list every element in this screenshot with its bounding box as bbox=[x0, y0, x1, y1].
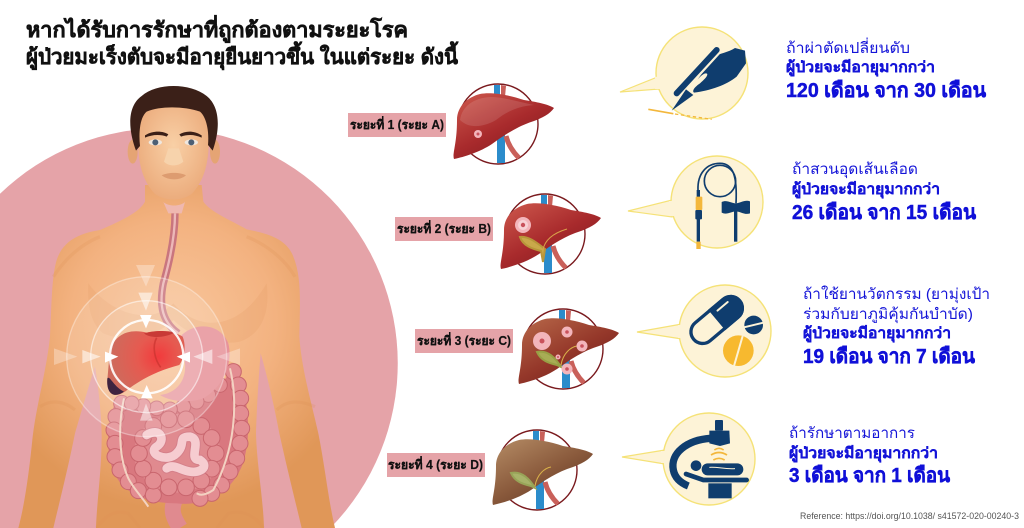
text block: liver transplant bbox=[786, 37, 986, 102]
text block: symptomatic care bbox=[789, 425, 950, 487]
text block: liver transplant: ถ้าผ่าตัดเปลี่ยนตับ bbox=[786, 37, 910, 57]
intestine backing bbox=[108, 365, 248, 504]
text block: innovative drugs: ผู้ป่วยจะมีอายุมากกว่า bbox=[803, 325, 951, 343]
speech bubble: medication bbox=[637, 285, 771, 377]
liver bbox=[107, 331, 185, 395]
icon: hand with scalpel bbox=[648, 48, 746, 119]
focus arrows bbox=[54, 265, 240, 421]
rectum bbox=[173, 497, 180, 528]
icon: pills bbox=[685, 289, 763, 366]
stage 2 label bbox=[395, 217, 493, 241]
text block: innovative drugs: ถ้าใช้ยานวัตกรรม (ยามุ่งเป้า bbox=[803, 285, 990, 304]
stage 4 label: ระยะที่ 4 (ระยะ D) bbox=[388, 456, 483, 472]
text block: embolization bbox=[792, 161, 976, 224]
pink background circle bbox=[0, 128, 398, 528]
stage 2 liver bbox=[501, 194, 601, 274]
text block: innovative drugs bbox=[803, 285, 990, 368]
text block: liver transplant: 120 เดือน จาก 30 เดือน bbox=[786, 79, 986, 102]
stage 4 liver bbox=[493, 430, 593, 510]
title: หากได้รับการรักษาที่ถูกต้องตามระยะโรค bbox=[26, 14, 408, 44]
stomach bbox=[160, 326, 230, 401]
colon bbox=[106, 364, 250, 506]
speech bubble: surgery bbox=[620, 27, 748, 119]
stage 1 label bbox=[348, 113, 446, 137]
colon streaks bbox=[120, 368, 234, 507]
text block: symptomatic care: ผู้ป่วยจะมีอายุมากกว่า bbox=[789, 445, 938, 463]
hair bbox=[130, 86, 218, 151]
icon: catheter bbox=[695, 163, 750, 249]
speech bubble: embolization bbox=[628, 156, 763, 249]
esophagus bbox=[162, 213, 178, 333]
throat bbox=[163, 202, 185, 213]
title bbox=[26, 14, 459, 71]
stage 2 label: ระยะที่ 2 (ระยะ B) bbox=[397, 220, 491, 236]
text block: symptomatic care: ถ้ารักษาตามอาการ bbox=[789, 425, 915, 442]
text block: embolization: ถ้าสวนอุดเส้นเลือด bbox=[792, 161, 918, 179]
text block: innovative drugs: ร่วมกับยาภูมิคุ้มกันบำบัด) bbox=[803, 306, 973, 324]
face bbox=[138, 101, 209, 199]
small intestine bbox=[131, 411, 224, 496]
inner focus ring bbox=[110, 320, 183, 393]
stage 3 liver bbox=[519, 309, 619, 389]
icon: scanner bbox=[673, 420, 747, 498]
text block: embolization: 26 เดือน จาก 15 เดือน bbox=[792, 201, 976, 224]
stage 3 label: ระยะที่ 3 (ระยะ C) bbox=[417, 332, 511, 348]
text block: innovative drugs: 19 เดือน จาก 7 เดือน bbox=[803, 345, 975, 368]
text block: symptomatic care: 3 เดือน จาก 1 เดือน bbox=[789, 464, 950, 487]
arm shading bbox=[40, 237, 315, 528]
title: ผู้ป่วยมะเร็งตับจะมีอายุยืนยาวขึ้น ในแต่ระยะ ดังนี้ bbox=[26, 41, 459, 71]
text block: liver transplant: ผู้ป่วยจะมีอายุมากกว่า bbox=[786, 59, 935, 77]
human body illustration bbox=[18, 86, 335, 528]
outer focus rings bbox=[67, 277, 227, 437]
stage 3 label bbox=[415, 329, 513, 353]
ears bbox=[128, 140, 220, 164]
stage 1 liver bbox=[454, 84, 554, 164]
facial features bbox=[145, 132, 202, 179]
stage 4 label bbox=[387, 453, 485, 477]
stage 1 label: ระยะที่ 1 (ระยะ A) bbox=[350, 116, 444, 132]
chest shading bbox=[138, 304, 247, 342]
speech bubble: symptomatic care bbox=[622, 413, 755, 505]
reference note: Reference: https://doi.org/10.1038/ s41572-020-00240-3 bbox=[800, 511, 1019, 521]
text block: embolization: ผู้ป่วยจะมีอายุมากกว่า bbox=[792, 181, 940, 199]
